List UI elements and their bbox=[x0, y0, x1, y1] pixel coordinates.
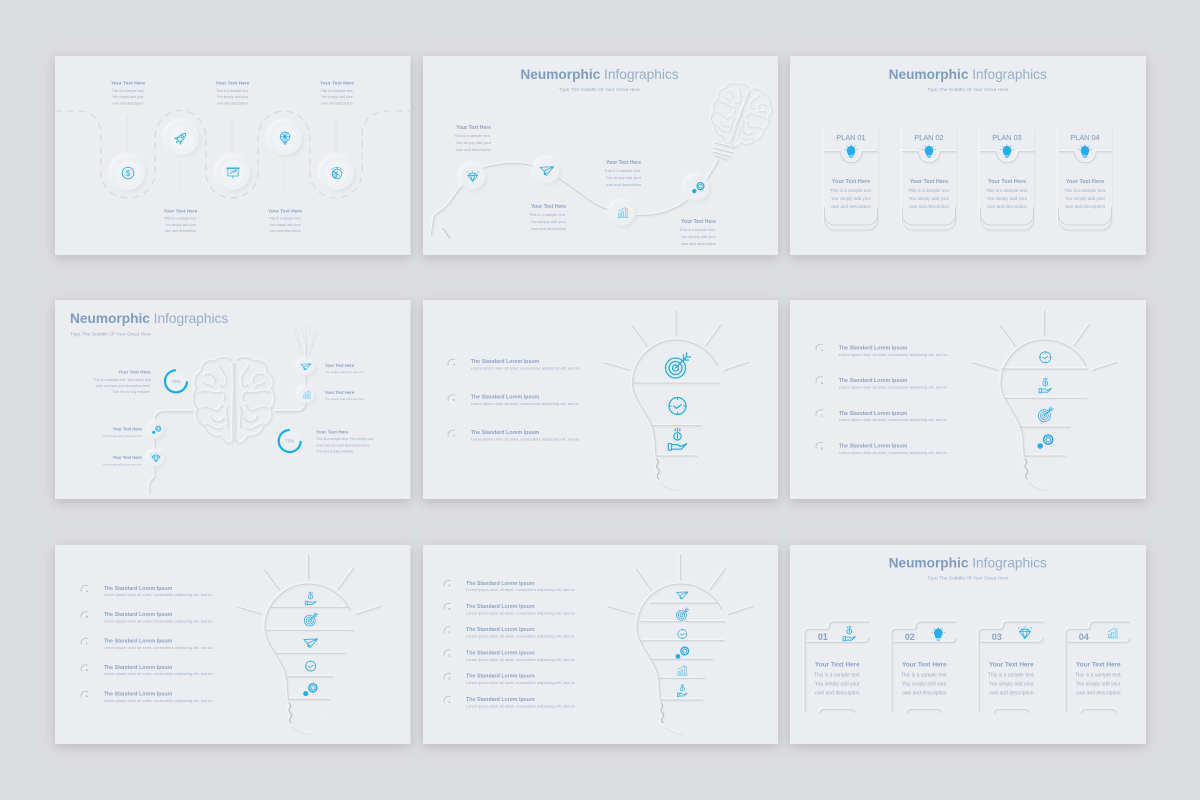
title: Neumorphic Infographics bbox=[70, 311, 228, 326]
list item B bbox=[816, 377, 948, 390]
list item D: Lorem ipsum dolor sit amet, consectetur adipiscing elit, sed do bbox=[839, 450, 948, 455]
text block 4: own and description bbox=[165, 229, 196, 233]
card: plan 01: This is a sample text. bbox=[830, 188, 872, 193]
node: plane bbox=[298, 359, 314, 375]
list item C bbox=[444, 627, 576, 638]
text block: plane: Your Text Here bbox=[531, 204, 566, 210]
subtitle: Type The Subtitle Of Your Great Here bbox=[927, 576, 1009, 582]
panel: bulb with four sections bbox=[790, 300, 1146, 499]
panel: bulb with five sections bbox=[55, 545, 410, 744]
tab card 02: Your Text Here bbox=[902, 662, 947, 668]
icon: hand bbox=[1039, 378, 1052, 393]
panel: four plans bbox=[790, 56, 1146, 255]
text block 5: Your Text Here bbox=[268, 208, 302, 214]
label: plane: You simply add your own text bbox=[325, 370, 364, 374]
list item C: The Standard Lorem Ipsum bbox=[466, 627, 535, 633]
list item D: The Standard Lorem Ipsum bbox=[839, 444, 908, 450]
tab card 04: This is a sample text. bbox=[1075, 673, 1122, 679]
subtitle: Type The Subtitle Of Your Great Here bbox=[559, 87, 640, 93]
node: presentation icon bbox=[216, 156, 250, 190]
card: plan 03: Your Text Here bbox=[988, 179, 1026, 185]
node: stopwatch icon bbox=[320, 156, 354, 190]
icon: clock bbox=[678, 630, 687, 638]
list item F: Lorem ipsum dolor sit amet, consectetur adipiscing elit, sed do bbox=[466, 703, 576, 708]
bulb illustration bbox=[604, 311, 748, 490]
node: plane bbox=[534, 158, 559, 183]
panel: timeline with five circles bbox=[55, 56, 410, 255]
list item A: The Standard Lorem Ipsum bbox=[466, 581, 535, 587]
label: chart: Your Text Here bbox=[325, 390, 355, 395]
tab card 04: 04 bbox=[1079, 632, 1089, 642]
card: plan 04: Your Text Here bbox=[1066, 179, 1104, 185]
text block: gears: Your Text Here bbox=[681, 219, 716, 225]
icon: gears bbox=[304, 684, 317, 696]
icon: plane bbox=[677, 592, 688, 599]
tab card 04: You simply add your bbox=[1076, 681, 1121, 687]
list item A: The Standard Lorem Ipsum bbox=[839, 346, 908, 352]
text block: upper left: This is a sample text. You simply add bbox=[93, 378, 151, 382]
node: rocket icon bbox=[165, 121, 199, 155]
curved route line bbox=[432, 160, 719, 237]
panel: bulb with six sections bbox=[423, 545, 778, 744]
list item A: Lorem ipsum dolor sit amet, consectetur adipiscing elit, sed do bbox=[839, 352, 948, 357]
text block: gears: This is a sample text. bbox=[679, 227, 716, 232]
tab card 01 bbox=[805, 622, 868, 713]
card: plan 02: You simply add your bbox=[909, 196, 950, 201]
list item C: C bbox=[453, 434, 456, 438]
list item B: The Standard Lorem Ipsum bbox=[471, 394, 540, 400]
node: dollar icon: $ bbox=[126, 168, 131, 178]
list item E: E bbox=[448, 676, 451, 680]
text block 3: This is a sample text. bbox=[321, 89, 353, 93]
card: plan 04: This is a sample text. bbox=[1064, 188, 1106, 193]
list item C: C bbox=[821, 414, 824, 418]
label: plane bbox=[325, 363, 364, 374]
list item B: The Standard Lorem Ipsum bbox=[104, 612, 173, 618]
text block 4 bbox=[163, 208, 198, 233]
label: chart bbox=[325, 390, 364, 401]
list item A: Lorem ipsum dolor sit amet, consectetur adipiscing elit, sed do bbox=[466, 587, 576, 592]
node: diamond bbox=[148, 450, 164, 466]
card: plan 01 bbox=[820, 122, 882, 230]
icon: gears bbox=[1038, 435, 1053, 448]
icon: clock bbox=[669, 398, 686, 414]
node: dollar icon bbox=[111, 156, 145, 190]
tab card 04: Your Text Here bbox=[1076, 662, 1121, 668]
tab card 03: This is a sample text. bbox=[988, 673, 1035, 679]
list item A bbox=[81, 585, 213, 597]
list item D: Lorem ipsum dolor sit amet, consectetur adipiscing elit, sed do bbox=[466, 657, 576, 662]
list item F: F bbox=[449, 700, 451, 704]
tab card 03: 03 bbox=[992, 632, 1002, 642]
card: plan 03: own and description bbox=[987, 204, 1028, 209]
list item B: The Standard Lorem Ipsum bbox=[839, 378, 908, 384]
list item D: The Standard Lorem Ipsum bbox=[104, 665, 173, 671]
bulb illustration bbox=[236, 555, 381, 734]
list item A: A bbox=[453, 362, 455, 366]
list item E: Lorem ipsum dolor sit amet, consectetur adipiscing elit, sed do bbox=[104, 698, 213, 703]
label: gears bbox=[103, 426, 142, 438]
panel: brain bulb journey bbox=[423, 56, 778, 255]
card: plan 01: PLAN 01 bbox=[836, 133, 866, 142]
text block: upper left bbox=[93, 370, 151, 394]
connector lines bbox=[150, 345, 306, 493]
text block 1 bbox=[111, 81, 145, 105]
card: plan 02: PLAN 02 bbox=[914, 133, 944, 142]
list item A bbox=[448, 359, 580, 370]
card: plan 01: Your Text Here bbox=[832, 179, 870, 185]
title: Neumorphic Infographics bbox=[520, 67, 679, 82]
text block 4: Your Text Here bbox=[163, 208, 198, 214]
title: Neumorphic Infographics bbox=[889, 67, 1047, 82]
card: plan 04: own and description bbox=[1065, 204, 1106, 209]
list item F bbox=[444, 696, 576, 708]
text block: diamond: This is a sample text. bbox=[454, 133, 491, 138]
list item A: Lorem ipsum dolor sit amet, consectetur adipiscing elit, sed do bbox=[104, 592, 213, 597]
tab card 03 bbox=[979, 622, 1042, 713]
text block: upper left: your own text and description here. bbox=[96, 384, 151, 388]
progress ring top left bbox=[165, 370, 187, 392]
tab card 03: You simply add your bbox=[989, 681, 1034, 687]
text block 1: Your Text Here bbox=[111, 81, 145, 87]
panel: central brain bbox=[55, 300, 410, 499]
text block 5: You simply add your bbox=[269, 223, 302, 227]
card: plan 04: You simply add your bbox=[1065, 196, 1106, 201]
card: plan 04: PLAN 04 bbox=[1070, 133, 1100, 142]
bulb illustration bbox=[608, 555, 753, 734]
text block: diamond: Your Text Here bbox=[456, 125, 491, 131]
progress ring bottom right bbox=[279, 430, 301, 452]
brain bulb illustration bbox=[703, 77, 778, 160]
tab card 02: own and description bbox=[902, 690, 947, 696]
list item C: Lorem ipsum dolor sit amet, consectetur adipiscing elit, sed do bbox=[104, 645, 213, 650]
list item C: The Standard Lorem Ipsum bbox=[839, 411, 908, 417]
tab card 02: You simply add your bbox=[902, 681, 947, 687]
label: diamond: You simply add your own text bbox=[103, 462, 142, 466]
sketch bulb at top right bbox=[294, 322, 319, 358]
text block: diamond bbox=[454, 125, 492, 152]
list item B: B bbox=[821, 381, 823, 385]
text block: upper left: This text is fully editable. bbox=[113, 390, 151, 394]
text block: upper left: Your Text Here bbox=[118, 370, 151, 375]
bulb illustration bbox=[972, 311, 1117, 490]
label: diamond: Your Text Here bbox=[113, 455, 142, 460]
text block 2 bbox=[215, 81, 250, 105]
text block 3: You simply add your bbox=[321, 95, 354, 99]
list item D: Lorem ipsum dolor sit amet, consectetur adipiscing elit, sed do bbox=[104, 671, 213, 676]
tab card 01: own and description bbox=[815, 690, 860, 696]
text block: chart: Your Text Here bbox=[606, 160, 641, 166]
icon: target bbox=[304, 612, 318, 626]
text block: diamond: You simply add your bbox=[456, 140, 492, 145]
list item E bbox=[81, 691, 213, 703]
dashed winding path bbox=[55, 110, 410, 198]
list item B: Lorem ipsum dolor sit amet, consectetur adipiscing elit, sed do bbox=[104, 618, 213, 624]
label: plane: Your Text Here bbox=[325, 363, 355, 368]
card: plan 02 bbox=[898, 122, 960, 230]
text block 2: This is a sample text. bbox=[216, 89, 249, 93]
card: plan 03: PLAN 03 bbox=[992, 133, 1022, 142]
icon: chart bbox=[677, 665, 687, 675]
text block: diamond: own and description bbox=[456, 147, 491, 152]
node: chart bbox=[298, 387, 314, 403]
text block: chart: This is a sample text. bbox=[604, 168, 641, 173]
list item A: Lorem ipsum dolor sit amet, consectetur adipiscing elit, sed do bbox=[471, 365, 580, 370]
card: plan 02: This is a sample text. bbox=[908, 188, 950, 193]
tab card 01: Your Text Here bbox=[815, 662, 860, 668]
node: bar chart bbox=[610, 200, 634, 226]
list item B bbox=[448, 394, 580, 406]
tab card 04 bbox=[1066, 622, 1129, 713]
icon: gears bbox=[676, 647, 689, 658]
list item A: A bbox=[86, 589, 88, 593]
text block 5: own and description bbox=[269, 229, 301, 233]
text block: gears: own and description bbox=[681, 241, 716, 246]
node: gears bbox=[148, 422, 164, 438]
label: gears: You simply add your own text bbox=[103, 434, 142, 438]
list item C: Lorem ipsum dolor sit amet, consectetur adipiscing elit, sed do bbox=[839, 417, 948, 422]
text block: plane: This is a sample text. bbox=[529, 212, 566, 217]
text block: lower right: your own text and description here. bbox=[316, 443, 371, 447]
tab card 04: own and description bbox=[1076, 690, 1121, 696]
icon: hand bbox=[677, 684, 687, 696]
list item D bbox=[81, 665, 213, 676]
label: chart: You simply add your own text bbox=[325, 397, 364, 401]
list item B: B bbox=[448, 607, 451, 611]
list item E bbox=[444, 673, 576, 685]
list item D bbox=[444, 650, 576, 662]
card: plan 03: This is a sample text. bbox=[986, 188, 1028, 193]
list item B: Lorem ipsum dolor sit amet, consectetur adipiscing elit, sed do bbox=[839, 384, 948, 390]
brain illustration bbox=[194, 358, 274, 443]
text block 1: This is a sample text. bbox=[112, 89, 144, 93]
text block 3 bbox=[320, 81, 354, 105]
list item C bbox=[816, 410, 948, 422]
list item B: The Standard Lorem Ipsum bbox=[466, 604, 535, 610]
list item A bbox=[816, 344, 948, 357]
tab card 02 bbox=[892, 622, 955, 713]
subtitle: Type The Subtitle Of Your Great Here bbox=[927, 87, 1009, 93]
list item A: The Standard Lorem Ipsum bbox=[104, 586, 173, 592]
list item D: D bbox=[448, 653, 451, 657]
progress ring top left: 75% bbox=[171, 379, 181, 384]
list item D: D bbox=[86, 668, 89, 672]
text block: lower right bbox=[316, 429, 373, 453]
text block 3: Your Text Here bbox=[320, 81, 354, 87]
icon: hand with coin bbox=[668, 428, 687, 450]
text block: chart: You simply add your bbox=[606, 175, 642, 180]
text block 4: This is a sample text. bbox=[164, 217, 197, 221]
list item E: Lorem ipsum dolor sit amet, consectetur adipiscing elit, sed do bbox=[466, 680, 576, 685]
text block: gears bbox=[679, 219, 717, 246]
text block 4: You simply add your bbox=[165, 223, 197, 227]
list item B: B bbox=[86, 615, 88, 619]
text block: lower right: This is a sample text. You simply add bbox=[316, 437, 373, 441]
list item B: Lorem ipsum dolor sit amet, consectetur adipiscing elit, sed do bbox=[471, 401, 580, 406]
progress ring bottom right: 75% bbox=[285, 439, 294, 444]
tab card 03: own and description bbox=[989, 690, 1034, 696]
list item D bbox=[816, 442, 948, 455]
node: diamond bbox=[460, 164, 485, 189]
card: plan 01: own and description bbox=[831, 204, 872, 209]
list item C: C bbox=[86, 642, 89, 646]
list item A: The Standard Lorem Ipsum bbox=[471, 359, 540, 365]
text block 5: This is a sample text. bbox=[269, 217, 301, 221]
card: plan 04 bbox=[1054, 122, 1116, 230]
icon: target bbox=[1038, 407, 1053, 422]
list item C bbox=[81, 638, 213, 650]
tab card 02: This is a sample text. bbox=[901, 673, 948, 679]
list item E: The Standard Lorem Ipsum bbox=[104, 692, 173, 698]
card: plan 03 bbox=[976, 122, 1038, 230]
icon: target bbox=[666, 353, 690, 378]
list item C bbox=[448, 430, 580, 441]
node: gears bbox=[684, 176, 709, 200]
card: plan 02: own and description bbox=[909, 204, 950, 209]
label: diamond bbox=[103, 455, 142, 466]
text block: chart bbox=[604, 160, 642, 187]
icon: plane bbox=[304, 639, 318, 648]
list item F: The Standard Lorem Ipsum bbox=[466, 697, 535, 703]
icon: target bbox=[676, 608, 689, 620]
tab card 01: 01 bbox=[818, 632, 828, 642]
list item C: C bbox=[448, 630, 451, 634]
list item D: D bbox=[821, 446, 824, 450]
panel: four numbered tabs bbox=[790, 545, 1146, 744]
icon: hand bbox=[305, 592, 316, 605]
list item B: Lorem ipsum dolor sit amet, consectetur adipiscing elit, sed do bbox=[466, 610, 576, 615]
dotted connector lines bbox=[127, 116, 336, 195]
text block 5 bbox=[268, 208, 302, 233]
node: brain bulb icon bbox=[268, 121, 302, 155]
list item C: Lorem ipsum dolor sit amet, consectetur adipiscing elit, sed do bbox=[466, 634, 576, 638]
list item E: The Standard Lorem Ipsum bbox=[466, 674, 535, 680]
text block: lower right: Your Text Here bbox=[316, 429, 349, 434]
list item C: The Standard Lorem Ipsum bbox=[104, 638, 173, 644]
text block 1: You simply add your bbox=[112, 95, 145, 99]
card: plan 01: You simply add your bbox=[831, 196, 872, 201]
list item A: A bbox=[448, 584, 451, 588]
list item B bbox=[81, 612, 213, 624]
list item B bbox=[444, 603, 576, 615]
list item C: Lorem ipsum dolor sit amet, consectetur adipiscing elit, sed do bbox=[471, 436, 580, 441]
subtitle: Type The Subtitle Of Your Great Here bbox=[70, 332, 151, 338]
icon: clock bbox=[1040, 352, 1051, 363]
text block: plane: own and description bbox=[531, 226, 566, 231]
list item E: E bbox=[86, 694, 88, 698]
text block 2: Your Text Here bbox=[215, 81, 250, 87]
text block 3: own and description bbox=[321, 101, 353, 105]
text block: lower right: This text is fully editable. bbox=[316, 449, 354, 453]
list item C: The Standard Lorem Ipsum bbox=[471, 430, 540, 436]
list item B: B bbox=[453, 398, 455, 402]
title: Neumorphic Infographics bbox=[889, 556, 1047, 570]
tab card 02: 02 bbox=[905, 632, 915, 642]
text block 2: own and description bbox=[217, 101, 248, 105]
tab card 01: This is a sample text. bbox=[814, 673, 861, 679]
text block 1: own and description bbox=[112, 101, 144, 105]
card: plan 02: Your Text Here bbox=[910, 179, 948, 185]
label: gears: Your Text Here bbox=[113, 426, 142, 432]
text block: plane bbox=[529, 204, 567, 231]
icon: clock bbox=[306, 661, 316, 671]
text block: plane: You simply add your bbox=[531, 219, 567, 224]
list item A bbox=[444, 580, 576, 592]
text block: gears: You simply add your bbox=[681, 234, 717, 239]
text block: chart: own and description bbox=[606, 182, 641, 187]
tab card 01: You simply add your bbox=[815, 681, 860, 687]
list item A: A bbox=[821, 348, 823, 352]
tab card 03: Your Text Here bbox=[989, 662, 1034, 668]
panel: bulb with three sections bbox=[423, 300, 778, 499]
text block 2: You simply add your bbox=[217, 95, 249, 99]
list item D: The Standard Lorem Ipsum bbox=[466, 650, 535, 656]
card: plan 03: You simply add your bbox=[987, 196, 1028, 201]
